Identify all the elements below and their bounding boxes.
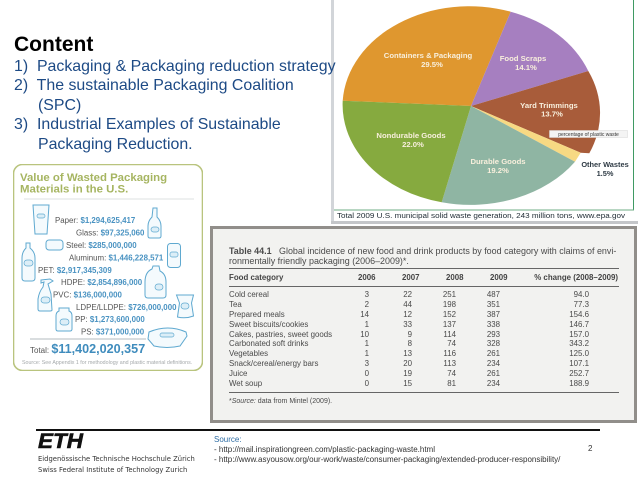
pie labels: Food Scraps: [500, 54, 546, 63]
table rows: Wet soup: [229, 378, 262, 388]
total value: Total: $11,402,020,357: [30, 342, 145, 356]
table rows: 487: [487, 290, 500, 299]
table rows: Juice: [229, 368, 247, 378]
pie slices: [343, 6, 600, 205]
table rows: 74: [447, 368, 456, 378]
callout: percentage of plastic waste: [550, 130, 628, 138]
callout: percentage of plastic waste: percentage of plastic waste: [558, 132, 619, 138]
pie labels: Yard Trimmings: [520, 101, 578, 110]
panel: food and drink packaging table: [210, 226, 637, 423]
source note: Source: See Appendix 1 for methodology and plastic material definitions.: [22, 360, 192, 366]
list: agenda items: Packaging Reduction.: [38, 136, 193, 153]
table header: Food category: [229, 273, 283, 282]
page number: 2: [588, 444, 592, 453]
table rows: 0: [365, 368, 369, 378]
table rows: 44: [403, 300, 412, 309]
label: other wastes: [581, 160, 629, 178]
table rows: 74: [447, 339, 456, 348]
table footnote: *Source: data from Mintel (2009).: [229, 398, 332, 405]
pie labels: Containers & Packaging: [384, 51, 473, 60]
table rows: Prepared meals: [229, 310, 285, 319]
table rows: 387: [487, 310, 500, 319]
table rows: 261: [487, 368, 500, 378]
table header: % change (2008–2009): [534, 273, 618, 282]
values: material costs: [38, 216, 177, 336]
table rows: Tea: [229, 300, 242, 309]
table rows: 81: [447, 378, 456, 388]
logo: ETH: ETH: [38, 430, 83, 453]
values: material costs: Glass: $97,325,060: [76, 228, 145, 238]
values: material costs: LDPE/LLDPE: $726,000,000: [76, 303, 177, 312]
table rows: 77.3: [574, 300, 589, 309]
list: agenda items: 1) Packaging & Packaging reduction strategy: [14, 58, 336, 75]
table rows: 251: [443, 290, 456, 299]
table rows: 9: [408, 330, 412, 338]
table rows: 116: [443, 349, 456, 358]
pie labels: 29.5%: [421, 60, 443, 69]
list: agenda items: (SPC): [38, 97, 81, 114]
table rows: 14: [360, 310, 369, 319]
table rows: 154.6: [569, 310, 589, 319]
table rows: 152: [443, 310, 456, 319]
pie labels: 14.1%: [515, 63, 537, 72]
table rows: [229, 290, 589, 388]
pie labels: 22.0%: [402, 140, 424, 149]
values: material costs: PP: $1,273,600,000: [75, 315, 145, 324]
institution name: [38, 454, 195, 474]
table rows: 1: [365, 349, 369, 358]
table rows: Sweet biscuits/cookies: [229, 320, 308, 329]
values: material costs: Aluminum: $1,446,228,571: [69, 254, 164, 262]
table caption: Table 44.1 Global incidence of new food and drink products by food category with claims of envi-: [229, 246, 616, 256]
table header: 2006: [358, 273, 376, 282]
table rows: 113: [443, 359, 456, 368]
table rows: 293: [487, 330, 500, 338]
table rows: 94.0: [574, 290, 589, 299]
table rows: Carbonated soft drinks: [229, 339, 308, 348]
table rows: 1: [365, 320, 369, 329]
source links: Source:: [214, 435, 242, 444]
pie labels: Nondurable Goods: [376, 131, 446, 140]
values: material costs: HDPE: $2,854,896,000: [61, 278, 143, 287]
table rows: 125.0: [569, 349, 589, 358]
label: other wastes: 1.5%: [597, 169, 614, 178]
source links: - http://www.asyousow.org/our-work/waste/consumer-packaging/extended-producer-responsibility/: [214, 455, 560, 464]
panel: value of wasted packaging materials: [13, 164, 203, 371]
pie labels: 19.2%: [487, 166, 509, 175]
pie labels: 13.7%: [541, 110, 563, 118]
table rows: 198: [443, 300, 456, 309]
source links: [214, 435, 560, 464]
list: agenda items: 2) The sustainable Packaging Coalition: [14, 77, 294, 94]
table rows: 252.7: [569, 368, 589, 378]
table rows: Vegetables: [229, 349, 268, 358]
caption: total waste: Total 2009 U.S. municipal solid waste generation, 243 million tons, www.epa.gov: [337, 213, 626, 220]
heading: Content: Content: [14, 33, 93, 56]
table rows: 1: [365, 339, 369, 348]
table rows: 3: [365, 290, 369, 299]
table rows: 234: [487, 359, 500, 368]
table rows: 15: [403, 378, 412, 388]
pie labels: [376, 51, 578, 175]
table rows: Cold cereal: [229, 290, 269, 299]
table rows: 20: [403, 359, 412, 368]
list: agenda items: 3) Industrial Examples of Sustainable: [14, 116, 281, 133]
pie labels: Durable Goods: [470, 157, 526, 166]
table rows: 19: [403, 368, 412, 378]
table rows: Cakes, pastries, sweet goods: [229, 330, 332, 338]
table caption: [229, 246, 616, 266]
table rows: 137: [443, 320, 456, 329]
table rows: 8: [408, 339, 412, 348]
table rows: 107.1: [569, 359, 589, 368]
title: value of wasted packaging: Value of Wasted Packaging: [20, 172, 167, 184]
table rows: 3: [365, 359, 369, 368]
list: agenda items: [14, 58, 336, 153]
table header: 2008: [446, 273, 464, 282]
values: material costs: PET: $2,917,345,309: [38, 266, 112, 275]
table rows: 13: [403, 349, 412, 358]
table rows: 2: [365, 300, 369, 309]
values: material costs: PS: $371,000,000: [81, 328, 145, 336]
panel: municipal solid waste pie chart: [331, 0, 638, 224]
footer rule: [36, 429, 600, 430]
label: other wastes: Other Wastes: [581, 160, 629, 169]
table rows: 10: [360, 330, 369, 338]
panel: value of wasted packaging materials: Materials in the U.S.: [20, 184, 128, 196]
table rows: 351: [487, 300, 500, 309]
table rows: 12: [403, 310, 412, 319]
table rows: 188.9: [569, 378, 589, 388]
table rows: 22: [403, 290, 412, 299]
values: material costs: PVC: $136,000,000: [53, 290, 122, 300]
table rows: 234: [487, 378, 500, 388]
table rows: 328: [487, 339, 500, 348]
table rows: 33: [403, 320, 412, 329]
table rows: 343.2: [569, 339, 589, 348]
table header: 2007: [402, 273, 420, 282]
values: material costs: Paper: $1,294,625,417: [55, 216, 136, 225]
icons: packaging containers: [22, 205, 194, 348]
institution name: Swiss Federal Institute of Technology Zurich: [38, 466, 187, 474]
table rows: 0: [365, 378, 369, 388]
table rows: 157.0: [569, 330, 589, 338]
values: material costs: Steel: $285,000,000: [66, 241, 137, 250]
table rows: 114: [443, 330, 456, 338]
table caption: ronmentally friendly packaging (2006–2009)*.: [229, 256, 409, 266]
table header: 2009: [490, 273, 508, 282]
source links: - http://mail.inspirationgreen.com/plastic-packaging-waste.html: [214, 445, 435, 454]
table rows: 261: [487, 349, 500, 358]
institution name: Eidgenössische Technische Hochschule Zürich: [38, 454, 195, 462]
table rows: 146.7: [569, 320, 589, 329]
table rows: Snack/cereal/energy bars: [229, 359, 318, 368]
table rows: 338: [487, 320, 500, 329]
table header: [229, 273, 618, 282]
